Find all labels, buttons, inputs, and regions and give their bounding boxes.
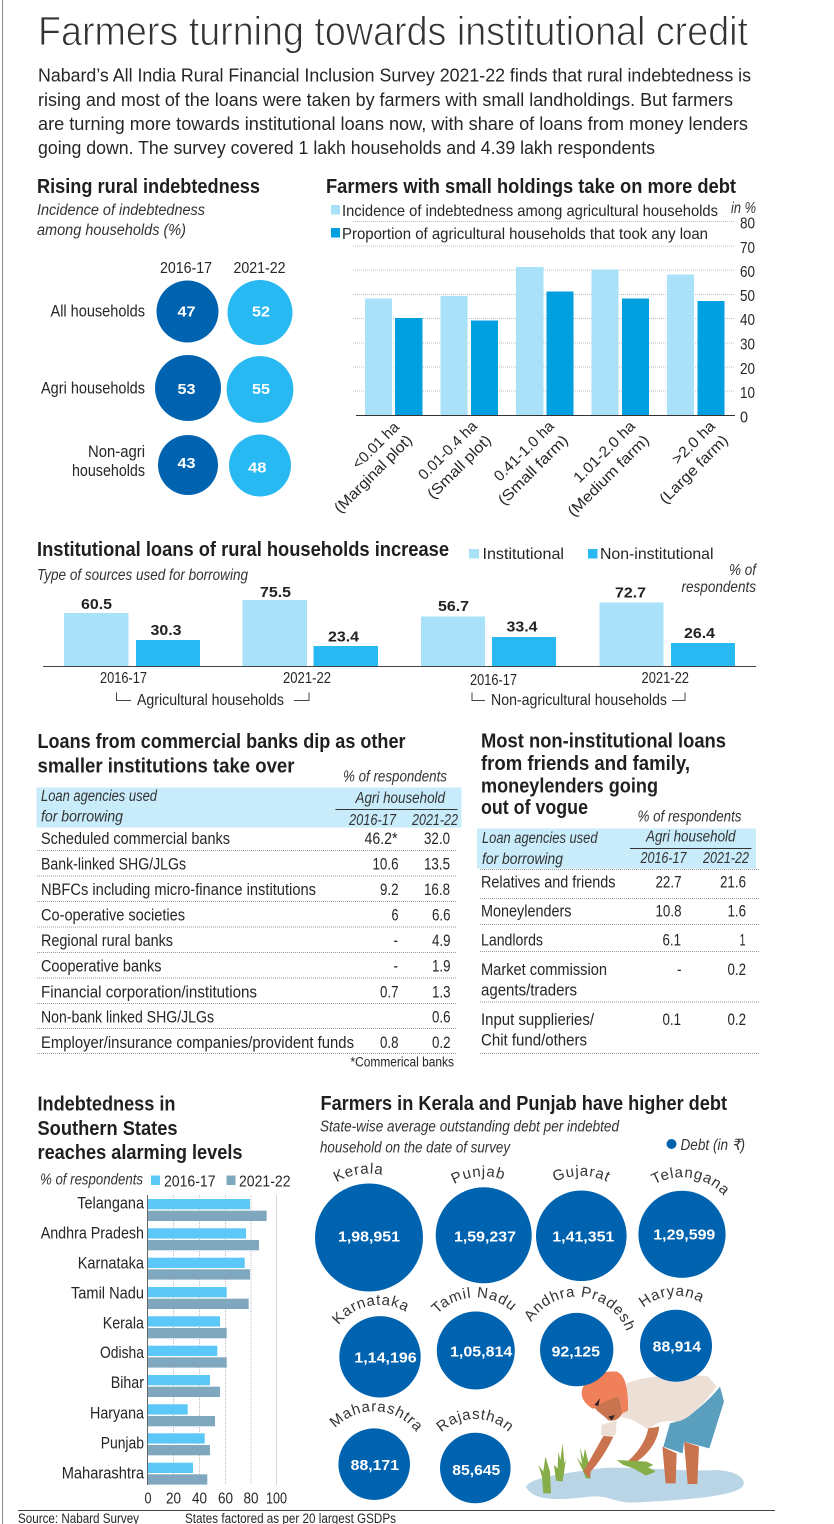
table header: Loan agencies used — [41, 788, 158, 805]
heading: Farmers with small holdings take on more debt — [326, 176, 736, 198]
legend — [469, 546, 714, 563]
table header: for borrowing — [482, 851, 563, 868]
bubble: Gujarat: 1,41,351 — [552, 1228, 614, 1246]
heading: from friends and family, — [481, 753, 690, 775]
year labels: 2021-22 — [283, 670, 331, 687]
legend — [40, 1172, 291, 1190]
bubble: Tamil Nadu: 1,05,814 — [450, 1344, 513, 1360]
state labels: Bihar — [111, 1374, 144, 1392]
table rows: Employer/insurance companies/provident funds — [41, 1034, 354, 1052]
table rows: Landlords — [481, 932, 543, 950]
x axis labels: (Marginal plot) — [331, 432, 416, 517]
x axis labels: 100 — [266, 1490, 287, 1508]
row: all households: All households — [50, 302, 145, 320]
intro text: Nabard’s All India Rural Financial Inclusion Survey 2021-22 finds that rural indebtedness is — [38, 64, 751, 86]
x axis labels: <0.01 ha — [349, 418, 403, 473]
table rows: - — [394, 932, 398, 950]
column years: 2016-17 — [160, 260, 212, 277]
bubble: Tamil Nadu — [430, 1287, 516, 1390]
table rows — [37, 830, 457, 1054]
x axis labels: 0 — [144, 1490, 152, 1508]
bubble: Punjab: Punjab — [450, 1165, 504, 1184]
value labels — [81, 584, 716, 646]
bubble: Haryana: Haryana — [638, 1288, 702, 1307]
table header: 2016-17 — [640, 850, 688, 867]
x axis labels: 1.01-2.0 ha — [570, 417, 639, 486]
heading: Rising rural indebtedness — [37, 176, 260, 198]
x axis labels: 80 — [244, 1490, 259, 1508]
panel: non-institutional loans table — [477, 730, 760, 1054]
legend: 2021-22 — [239, 1174, 291, 1190]
unit: % of respondents — [638, 808, 742, 826]
row: all households — [50, 280, 292, 345]
heading: Indebtedness in — [38, 1094, 176, 1116]
illustration: farmer planting rice — [526, 1371, 744, 1503]
bubble: Karnataka: 1,14,196 — [354, 1350, 417, 1366]
panel: small holdings debt bar chart — [326, 176, 756, 520]
bubble: Rajasthan: 85,645 — [452, 1462, 500, 1479]
y axis labels — [740, 216, 755, 426]
legend: 2016-17 — [164, 1174, 216, 1190]
value labels: 30.3 — [150, 622, 182, 639]
bubble: Rajasthan — [436, 1410, 512, 1504]
panel: commercial banks table — [36, 731, 462, 1070]
footer — [18, 1510, 775, 1524]
legend: Incidence of indebtedness among agricultural households — [342, 203, 718, 220]
gridlines and axis — [353, 222, 735, 416]
bubble: Punjab: 1,59,237 — [454, 1228, 516, 1246]
bubble: Maharashtra: 88,171 — [351, 1457, 399, 1474]
unit: % of respondents — [343, 768, 447, 786]
bubble: Gujarat: Gujarat — [553, 1165, 610, 1182]
year labels: 2016-17 — [470, 672, 517, 689]
value labels: 23.4 — [328, 628, 360, 646]
state labels: Andhra Pradesh — [41, 1224, 144, 1242]
y axis labels: 10 — [740, 385, 755, 402]
table rows: 10.8 — [656, 902, 682, 920]
panel: institutional loans — [37, 539, 757, 709]
panel: state debt bubbles — [315, 1093, 745, 1504]
heading — [38, 731, 406, 778]
x axis labels — [331, 417, 732, 520]
title: Farmers turning towards institutional credit — [38, 8, 749, 54]
table header: Agri household — [355, 790, 446, 807]
x axis labels: (Medium farm) — [564, 432, 653, 520]
table rows: Bank-linked SHG/JLGs — [41, 856, 186, 874]
table header — [477, 828, 756, 868]
x axis labels: (Large farm) — [656, 432, 732, 507]
bubble: Andhra Pradesh — [526, 1286, 634, 1386]
y axis labels: 30 — [740, 336, 755, 354]
table rows — [480, 870, 760, 1054]
row: agri households: 55 — [252, 381, 270, 398]
table rows: - — [394, 958, 398, 976]
table rows: Market commission — [481, 961, 607, 979]
y axis labels: 80 — [740, 216, 755, 232]
table rows: 32.0 — [424, 830, 450, 848]
value labels: 56.7 — [438, 598, 469, 615]
table rows: 0.2 — [432, 1034, 450, 1052]
value labels: 72.7 — [615, 584, 646, 602]
y axis labels: 70 — [740, 240, 755, 257]
bars — [148, 1195, 267, 1485]
table rows: Relatives and friends — [481, 874, 616, 892]
table header: 2021-22 — [411, 812, 458, 829]
heading — [481, 730, 726, 819]
bubble: Maharashtra — [329, 1403, 421, 1500]
state labels: Haryana — [90, 1404, 145, 1422]
x axis labels: >2.0 ha — [669, 417, 719, 468]
table rows: Chit fund/others — [481, 1032, 587, 1050]
heading: smaller institutions take over — [38, 756, 295, 778]
bubble: Karnataka — [332, 1295, 421, 1398]
row: non-agri households — [72, 434, 291, 496]
state labels: Kerala — [103, 1314, 145, 1332]
state labels: Telangana — [77, 1194, 145, 1212]
heading — [38, 1094, 242, 1164]
heading: moneylenders going — [481, 776, 658, 798]
group bracket: non-agricultural: Non-agricultural households — [491, 692, 667, 709]
table rows: 6 — [392, 906, 398, 924]
table rows: 4.9 — [432, 932, 450, 950]
value labels: 33.4 — [506, 618, 538, 636]
intro text — [38, 64, 751, 158]
panel: southern states indebtedness — [38, 1094, 291, 1508]
table rows: 6.6 — [432, 906, 450, 924]
row: all households: 47 — [178, 304, 196, 320]
intro text: rising and most of the loans were taken by farmers with small landholdings. But farmers — [38, 89, 733, 110]
row: all households: 52 — [252, 304, 270, 320]
y axis labels: 20 — [740, 361, 755, 378]
table rows: 1 — [740, 932, 746, 950]
row: non-agri households: 43 — [178, 455, 196, 472]
subtitle — [320, 1118, 620, 1156]
table rows: Cooperative banks — [41, 958, 162, 976]
y axis labels: 50 — [740, 288, 755, 305]
table header: for borrowing — [41, 808, 123, 826]
bubble: Maharashtra: Maharashtra — [329, 1403, 421, 1432]
x axis labels: 20 — [166, 1490, 181, 1508]
heading: Institutional loans of rural households increase — [37, 539, 449, 561]
subtitle — [37, 202, 205, 239]
unit: in % — [731, 200, 756, 217]
x axis labels — [144, 1490, 287, 1508]
table rows: 10.6 — [372, 856, 398, 874]
heading: reaches alarming levels — [38, 1142, 242, 1164]
bubble: Telangana: Telangana — [650, 1167, 728, 1196]
table header: 2021-22 — [702, 850, 749, 867]
bubble: Rajasthan: Rajasthan — [436, 1410, 512, 1432]
table rows: Input supplieries/ — [481, 1011, 594, 1029]
heading: out of vogue — [481, 797, 588, 819]
subtitle: Incidence of indebtedness — [37, 202, 205, 219]
table rows: 6.1 — [662, 932, 681, 950]
bubble: Gujarat — [536, 1165, 627, 1282]
year labels: 2021-22 — [642, 670, 689, 687]
bubble: Andhra Pradesh: Andhra Pradesh — [526, 1286, 634, 1330]
group bracket: agricultural: Agricultural households — [137, 692, 284, 709]
table rows: 1.6 — [728, 902, 746, 920]
table rows: Regional rural banks — [41, 932, 173, 950]
intro text: are turning more towards institutional loans now, with share of loans from money lenders — [38, 113, 748, 134]
heading: Farmers in Kerala and Punjab have higher debt — [320, 1093, 727, 1115]
row: non-agri households: 48 — [248, 460, 266, 476]
table rows: 1.3 — [432, 984, 450, 1002]
table rows: agents/traders — [481, 982, 577, 1000]
subtitle: household on the date of survey — [320, 1140, 511, 1156]
unit — [682, 562, 757, 596]
bars — [43, 600, 756, 666]
panel: rising rural indebtedness — [37, 176, 293, 496]
bubble: Haryana — [638, 1288, 712, 1382]
table rows: Financial corporation/institutions — [41, 984, 257, 1002]
x axis labels: 0.41-1.0 ha — [491, 417, 558, 485]
state labels: Karnataka — [78, 1254, 145, 1272]
row: agri households: 53 — [178, 381, 196, 398]
year labels: 2016-17 — [100, 670, 147, 687]
state labels: Odisha — [100, 1344, 145, 1362]
table rows: 21.6 — [720, 874, 746, 892]
column years — [160, 260, 286, 277]
row: agri households: Agri households — [41, 380, 145, 398]
bubble: Kerala — [315, 1162, 423, 1292]
table rows: - — [677, 961, 682, 979]
table rows: 0.2 — [728, 1011, 746, 1029]
value labels: 60.5 — [81, 596, 112, 613]
bubble: Andhra Pradesh: 92,125 — [552, 1344, 600, 1360]
table rows: 22.7 — [656, 874, 682, 892]
table header — [36, 788, 462, 829]
heading: Loans from commercial banks dip as other — [38, 731, 406, 753]
state labels — [41, 1194, 145, 1482]
x axis labels: 60 — [218, 1490, 233, 1508]
bubble: Kerala: 1,98,951 — [338, 1228, 400, 1246]
bubble: Haryana: 88,914 — [653, 1338, 702, 1356]
table rows: 0.8 — [380, 1034, 398, 1052]
heading: Southern States — [38, 1118, 178, 1140]
x axis labels: 40 — [192, 1490, 207, 1508]
subtitle: State-wise average outstanding debt per indebted — [320, 1118, 620, 1136]
table rows: 9.2 — [380, 881, 398, 899]
table rows: 46.2* — [364, 830, 398, 848]
legend: % of respondents — [40, 1172, 143, 1188]
bubble: Kerala: Kerala — [333, 1162, 382, 1182]
row: non-agri households: Non-agri — [88, 443, 145, 461]
unit: % of — [729, 562, 757, 579]
x axis labels: (Small farm) — [495, 432, 572, 509]
intro text: going down. The survey covered 1 lakh households and 4.39 lakh respondents — [38, 137, 655, 158]
table rows: NBFCs including micro-finance institutions — [41, 881, 316, 899]
subtitle: among households (%) — [37, 222, 186, 239]
state labels: Punjab — [101, 1434, 144, 1452]
bubble: Punjab — [436, 1165, 532, 1284]
x axis labels: (Small plot) — [424, 432, 495, 503]
table rows: 0.1 — [662, 1011, 681, 1029]
value labels: 26.4 — [684, 625, 716, 642]
subtitle: Type of sources used for borrowing — [37, 567, 248, 584]
table header: Loan agencies used — [482, 830, 599, 847]
table rows: Non-bank linked SHG/JLGs — [41, 1008, 214, 1026]
legend: Debt (in ₹) — [680, 1137, 745, 1154]
bubble: Karnataka: Karnataka — [332, 1295, 408, 1324]
footnote: *Commerical banks — [350, 1054, 454, 1070]
row: agri households — [41, 355, 293, 423]
state labels: Maharashtra — [62, 1464, 145, 1482]
y axis labels: 40 — [740, 312, 755, 329]
x axis labels: 0.01-0.4 ha — [415, 417, 481, 484]
table rows: 1.9 — [432, 958, 450, 976]
table rows: Scheduled commercial banks — [41, 830, 230, 848]
y axis labels: 60 — [740, 264, 755, 281]
bubble: Tamil Nadu: Tamil Nadu — [430, 1287, 516, 1312]
table header: 2016-17 — [348, 812, 397, 829]
bubble: Telangana — [638, 1167, 728, 1278]
legend — [331, 203, 718, 243]
table rows: 0.2 — [728, 961, 746, 979]
table rows: 13.5 — [424, 856, 450, 874]
state labels: Tamil Nadu — [71, 1284, 144, 1302]
table rows: Co-operative societies — [41, 906, 185, 924]
y axis labels: 0 — [740, 410, 748, 426]
heading: Most non-institutional loans — [481, 730, 726, 752]
bars — [365, 267, 724, 415]
table rows: 0.7 — [380, 984, 398, 1002]
legend: Proportion of agricultural households that took any loan — [342, 226, 708, 243]
value labels: 75.5 — [260, 584, 291, 601]
unit: respondents — [682, 579, 756, 596]
bubble: Telangana: 1,29,599 — [653, 1226, 715, 1244]
table rows: Moneylenders — [481, 902, 572, 920]
table rows: 0.6 — [432, 1008, 450, 1026]
legend: Non-institutional — [600, 546, 714, 563]
legend: Institutional — [482, 546, 564, 563]
table rows: 16.8 — [424, 881, 450, 899]
year labels — [100, 670, 689, 689]
table header: Agri household — [645, 828, 737, 846]
row: non-agri households: households — [72, 462, 145, 480]
column years: 2021-22 — [234, 260, 286, 277]
gridlines — [174, 1195, 276, 1485]
